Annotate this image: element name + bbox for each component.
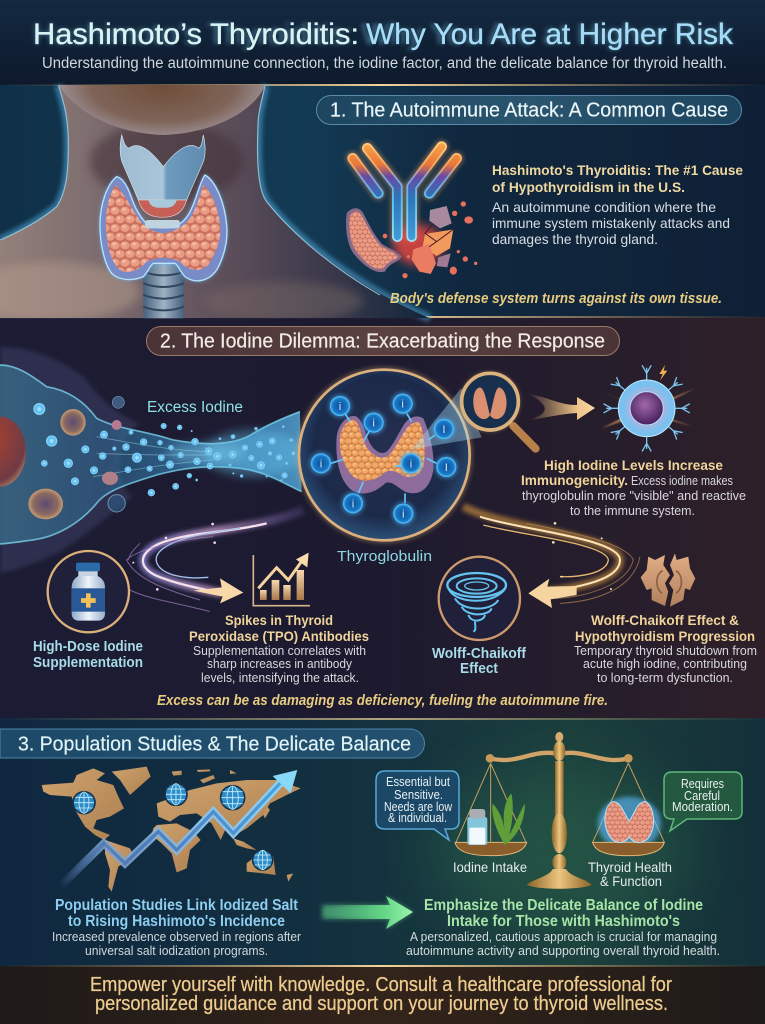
label: Thyroglobulin: [337, 548, 432, 565]
icon: antibody attacking thyroid: [346, 147, 477, 278]
world map with rising trend: [42, 767, 301, 892]
text: description: An autoimmune condition where the: [492, 199, 716, 215]
text: hypothyroidism progression: Wolff-Chaikoff Effect &: [591, 613, 739, 628]
label: thyroid health and function: & Function: [600, 873, 662, 889]
text: delicate balance: [406, 897, 720, 958]
title: Why You Are at Higher Risk: [366, 18, 734, 51]
panel: the autoimmune attack: [0, 85, 743, 322]
callout: careful moderation: Careful: [684, 789, 720, 803]
text: immunogenicity: High Iodine Levels Increase: [544, 458, 723, 473]
text: population studies: Increased prevalence observed in regions after: [52, 929, 302, 944]
icon: immune cell: [598, 365, 695, 451]
label: thyroid health and function: [588, 859, 672, 889]
text: wolff-chaikoff label: Effect: [460, 661, 498, 677]
callout: Body's defense system turns against its own tissue.: [390, 290, 722, 307]
text: high-dose supplementation: Supplementation: [33, 655, 143, 671]
callout: essential but sensitive: Sensitive.: [394, 788, 443, 802]
arrow: right swirl: [463, 507, 640, 608]
heading pill: 3. Population Studies & The Delicate Balance: [18, 734, 411, 756]
text: immunogenicity: thyroglobulin more "visible" and reactive: [522, 488, 746, 503]
callout: Excess can be as damaging as deficiency, fueling the autoimmune fire.: [157, 692, 608, 709]
icon: glowing thyroid: [100, 175, 227, 281]
chin: [58, 85, 265, 135]
icon: iodine atoms: i: [320, 458, 322, 470]
panel: the iodine dilemma: [0, 326, 757, 709]
text: delicate balance: autoimmune activity and supporting overall thyroid health.: [406, 943, 720, 958]
icon: iodine atoms: I: [445, 462, 448, 474]
callout: careful moderation: [664, 772, 742, 831]
icon: iodine atoms: i: [352, 498, 354, 510]
text: number one cause: Hashimoto's Thyroiditis: The #1 Cause: [492, 163, 743, 178]
text: description: damages the thyroid gland.: [492, 231, 658, 247]
icon: left pan with salt and seaweed: [455, 763, 527, 856]
text: high-dose supplementation: [33, 639, 143, 671]
icon: iodine atoms: i: [402, 509, 405, 521]
text: delicate balance: Emphasize the Delicate Balance of Iodine: [424, 897, 703, 914]
icon: rising bar chart: [253, 553, 310, 606]
panel: population studies and balance: [0, 729, 742, 958]
callout: careful moderation: Requires: [681, 777, 724, 791]
icon: iodine atoms: [310, 392, 458, 525]
text: high-dose supplementation: High-Dose Iodine: [33, 639, 143, 655]
text: population studies: [52, 897, 302, 958]
heading pill: 1. The Autoimmune Attack: A Common Cause: [330, 100, 728, 122]
text: number one cause: [492, 163, 743, 195]
text: immunogenicity: to the immune system.: [570, 503, 695, 518]
icon: iodine atoms: i: [339, 401, 341, 413]
text: population studies: Population Studies Link Iodized Salt: [55, 897, 298, 914]
beam to magnifier: [412, 388, 482, 449]
callout: essential but sensitive: & individual.: [388, 811, 447, 825]
illustration: neck and thyroid: [0, 85, 430, 322]
icon: globe markers: [73, 783, 273, 870]
icon: trachea: [143, 262, 184, 318]
callout: careful moderation: Moderation.: [672, 800, 733, 814]
text: immunogenicity: Excess iodine makes: [631, 473, 733, 488]
text: description: immune system mistakenly attacks and: [492, 215, 730, 231]
icon: tornado: [439, 557, 520, 640]
icon: supplement bottle: [48, 551, 129, 632]
icon: iodine atoms: I: [442, 424, 446, 436]
footer message: [90, 973, 672, 1015]
text: hypothyroidism progression: Temporary thyroid shutdown from: [574, 643, 757, 658]
text: hypothyroidism progression: acute high iodine, contributing: [583, 656, 747, 671]
text: TPO antibodies: levels, intensifying the attack.: [201, 670, 359, 685]
heading pill: 2. The Iodine Dilemma: Exacerbating the Response: [160, 330, 605, 352]
icon: iodine atoms: i: [410, 458, 412, 470]
icon: larynx: [120, 135, 205, 200]
callout: essential but sensitive: Essential but: [386, 775, 450, 789]
icon: magnifying glass: [460, 372, 536, 449]
footer message: personalized guidance and support on your journey to thyroid wellness.: [95, 992, 668, 1015]
text: wolff-chaikoff label: [432, 646, 526, 677]
text: immunogenicity: Immunogenicity.: [521, 473, 628, 488]
text: TPO antibodies: Spikes in Thyroid: [225, 613, 333, 628]
text: population studies: universal salt iodization programs.: [85, 943, 268, 958]
text: TPO antibodies: Peroxidase (TPO) Antibodies: [189, 629, 369, 644]
text: delicate balance: Intake for Those with Hashimoto's: [447, 913, 680, 930]
text: description: [492, 199, 730, 247]
callout: essential but sensitive: Needs are low: [384, 800, 453, 814]
label: Excess Iodine: [147, 399, 243, 416]
icon: iodine atoms: i: [401, 399, 404, 411]
footer message: Empower yourself with knowledge. Consult a healthcare professional for: [90, 973, 672, 996]
title: Hashimoto’s Thyroiditis:: [33, 18, 359, 51]
text: TPO antibodies: sharp increases in antibody: [207, 656, 352, 671]
text: population studies: to Rising Hashimoto's Incidence: [68, 913, 285, 930]
text: hypothyroidism progression: Hypothyroidism Progression: [575, 629, 755, 644]
icon: right pan with thyroid: [593, 763, 664, 856]
title: Hashimoto’s Thyroiditis: Why You Are at Higher Risk: [33, 18, 734, 51]
icon: iodine atoms: i: [372, 418, 375, 430]
text: wolff-chaikoff label: Wolff-Chaikoff: [432, 646, 526, 662]
subtitle: Understanding the autoimmune connection, the iodine factor, and the delicate balance for thyroid health.: [42, 55, 727, 72]
icon: broken gear: [641, 553, 695, 607]
text: TPO antibodies: [189, 613, 369, 685]
arrow: to immune cell: [527, 393, 595, 420]
illustration: thyroglobulin sphere: [296, 367, 482, 543]
arrow: left swirl: [127, 510, 303, 612]
text: hypothyroidism progression: [574, 613, 757, 685]
illustration: balance scale: [455, 732, 664, 889]
label: thyroid health and function: Thyroid Health: [588, 859, 672, 875]
label: iodine intake: Iodine Intake: [453, 859, 527, 875]
text: delicate balance: A personalized, cautious approach is crucial for managing: [410, 929, 717, 944]
icon: cells: [0, 396, 125, 519]
arrow: green connector: [322, 896, 413, 929]
text: hypothyroidism progression: to long-term dysfunction.: [597, 670, 733, 685]
callout: essential but sensitive: [376, 771, 459, 840]
text: number one cause: of Hypothyroidism in the U.S.: [492, 180, 685, 195]
text: TPO antibodies: Supplementation correlates with: [193, 643, 366, 658]
text: immunogenicity: [521, 458, 746, 518]
illustration: iodine flow: [0, 347, 303, 573]
